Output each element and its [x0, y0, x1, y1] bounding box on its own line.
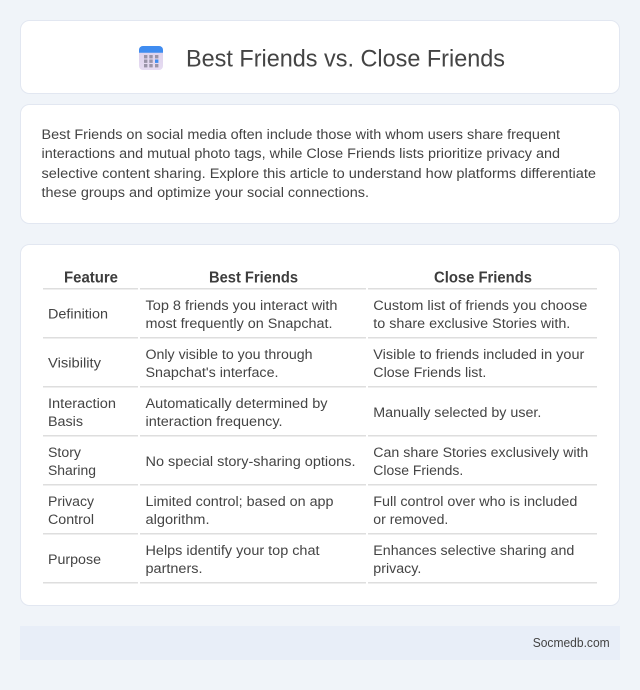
- row: interaction basis: interaction frequency.: [146, 414, 282, 430]
- row: privacy control: Control: [48, 512, 94, 528]
- row: definition: Top 8 friends you interact with: [146, 298, 338, 314]
- table header: Feature: [64, 270, 118, 286]
- intro text: interactions and mutual photo tags, while Close Friends lists prioritize privacy and: [42, 146, 560, 162]
- footer bar: Socmedb.com: [533, 636, 610, 650]
- row: visibility: Visibility: [48, 356, 102, 372]
- intro text: [42, 127, 596, 201]
- row: visibility: [48, 347, 585, 381]
- row: privacy control: or removed.: [373, 512, 448, 528]
- row: story sharing: Can share Stories exclusively with: [373, 445, 588, 461]
- row: purpose: partners.: [146, 561, 202, 577]
- intro text: selective content sharing. Explore this article to understand how platforms differentiate: [42, 166, 596, 182]
- title: Best Friends vs. Close Friends: [186, 46, 505, 72]
- row: definition: [48, 298, 587, 332]
- row: purpose: Helps identify your top chat: [146, 543, 320, 559]
- row: privacy control: Privacy: [48, 494, 95, 510]
- panel: intro: [20, 104, 620, 224]
- row: interaction basis: Basis: [48, 414, 83, 430]
- row: purpose: privacy.: [373, 561, 421, 577]
- table header: Best Friends: [209, 270, 298, 286]
- row: interaction basis: Automatically determined by: [146, 396, 328, 412]
- intro text: Best Friends on social media often include those with whom users share frequent: [42, 127, 560, 143]
- row: privacy control: algorithm.: [146, 512, 210, 528]
- panel: title card: [20, 20, 620, 94]
- icon: calendar: [139, 46, 163, 70]
- row: story sharing: Sharing: [48, 463, 96, 479]
- footer bar: [20, 626, 620, 660]
- row: story sharing: Close Friends.: [373, 463, 463, 479]
- table rules: [43, 288, 597, 584]
- row: privacy control: Limited control; based on app: [146, 494, 334, 510]
- row: definition: Custom list of friends you choose: [373, 298, 587, 314]
- row: definition: to share exclusive Stories with.: [373, 316, 570, 332]
- row: interaction basis: Interaction: [48, 396, 116, 412]
- row: purpose: Purpose: [48, 552, 101, 568]
- row: purpose: [48, 543, 574, 577]
- row: story sharing: Story: [48, 445, 82, 461]
- row: interaction basis: [48, 396, 541, 430]
- row: privacy control: [48, 494, 577, 528]
- table header: Close Friends: [434, 270, 532, 286]
- row: story sharing: [48, 445, 588, 479]
- row: visibility: Only visible to you through: [146, 347, 312, 363]
- row: visibility: Close Friends list.: [373, 365, 486, 381]
- row: visibility: Visible to friends included in your: [373, 347, 585, 363]
- row: definition: Definition: [48, 306, 108, 322]
- table header: [64, 270, 532, 286]
- panel: comparison table: [20, 244, 620, 606]
- row: purpose: Enhances selective sharing and: [373, 543, 574, 559]
- row: story sharing: No special story-sharing options.: [146, 454, 356, 470]
- row: privacy control: Full control over who is included: [373, 494, 577, 510]
- row: visibility: Snapchat's interface.: [146, 365, 278, 381]
- intro text: these groups and optimize your social connections.: [42, 185, 369, 201]
- row: interaction basis: Manually selected by user.: [373, 405, 541, 421]
- row: definition: most frequently on Snapchat.: [146, 316, 332, 332]
